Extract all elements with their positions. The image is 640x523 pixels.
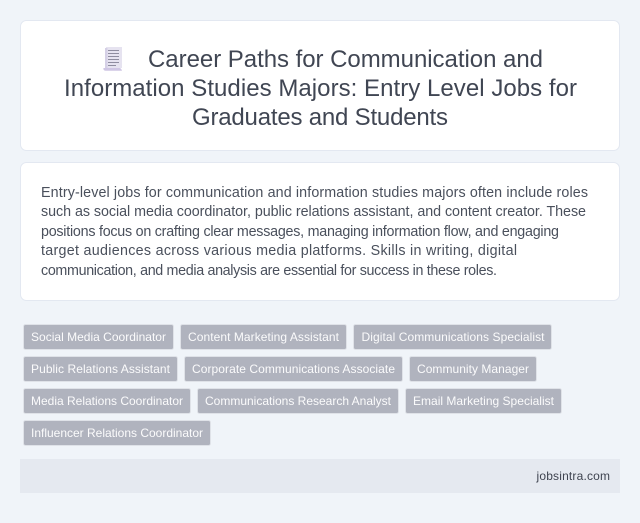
tag: Digital Communications Specialist: Digital Communications Specialist xyxy=(362,330,545,344)
tag: Public Relations Assistant xyxy=(24,356,178,382)
panel: title card xyxy=(20,20,620,150)
footer source text: jobsintra.com xyxy=(536,469,610,483)
tag: Social Media Coordinator: Social Media Coordinator xyxy=(31,330,166,344)
tag: Community Manager: Community Manager xyxy=(417,362,529,376)
description text: communication, and media analysis are essential for success in these roles. xyxy=(41,263,497,279)
tag: Content Marketing Assistant xyxy=(180,324,346,350)
description text: such as social media coordinator, public relations assistant, and content creator. These xyxy=(41,204,586,220)
title xyxy=(64,46,577,131)
description text: target audiences across various media platforms. Skills in writing, digital xyxy=(41,243,517,259)
description text: positions focus on crafting clear messages, managing information flow, and engaging xyxy=(41,224,559,240)
tag: Community Manager xyxy=(410,356,536,382)
tag: Influencer Relations Coordinator xyxy=(24,420,210,446)
tag: Communications Research Analyst xyxy=(198,388,398,414)
tag: Digital Communications Specialist xyxy=(354,324,552,350)
panel: description card xyxy=(20,162,620,300)
tag: Email Marketing Specialist: Email Marketing Specialist xyxy=(413,394,555,408)
tag: Communications Research Analyst: Communications Research Analyst xyxy=(205,394,392,408)
tags: job titles xyxy=(24,324,562,446)
tag: Email Marketing Specialist xyxy=(406,388,562,414)
tag: Media Relations Coordinator: Media Relations Coordinator xyxy=(31,394,183,408)
tag: Social Media Coordinator xyxy=(24,324,174,350)
tag: Influencer Relations Coordinator: Influencer Relations Coordinator xyxy=(31,426,203,440)
footer bar xyxy=(20,459,620,493)
tag: Media Relations Coordinator xyxy=(24,388,190,414)
title: Graduates and Students xyxy=(192,104,448,131)
description text xyxy=(41,185,588,279)
tag: Corporate Communications Associate xyxy=(184,356,402,382)
tag: Content Marketing Assistant: Content Marketing Assistant xyxy=(188,330,340,344)
icon: document scroll xyxy=(103,47,122,71)
title: Information Studies Majors: Entry Level Jobs for xyxy=(64,75,577,102)
tag: Corporate Communications Associate: Corporate Communications Associate xyxy=(192,362,395,376)
description text: Entry-level jobs for communication and information studies majors often include roles xyxy=(41,185,588,201)
title: Career Paths for Communication and xyxy=(148,46,543,73)
tag: Public Relations Assistant: Public Relations Assistant xyxy=(31,362,171,376)
